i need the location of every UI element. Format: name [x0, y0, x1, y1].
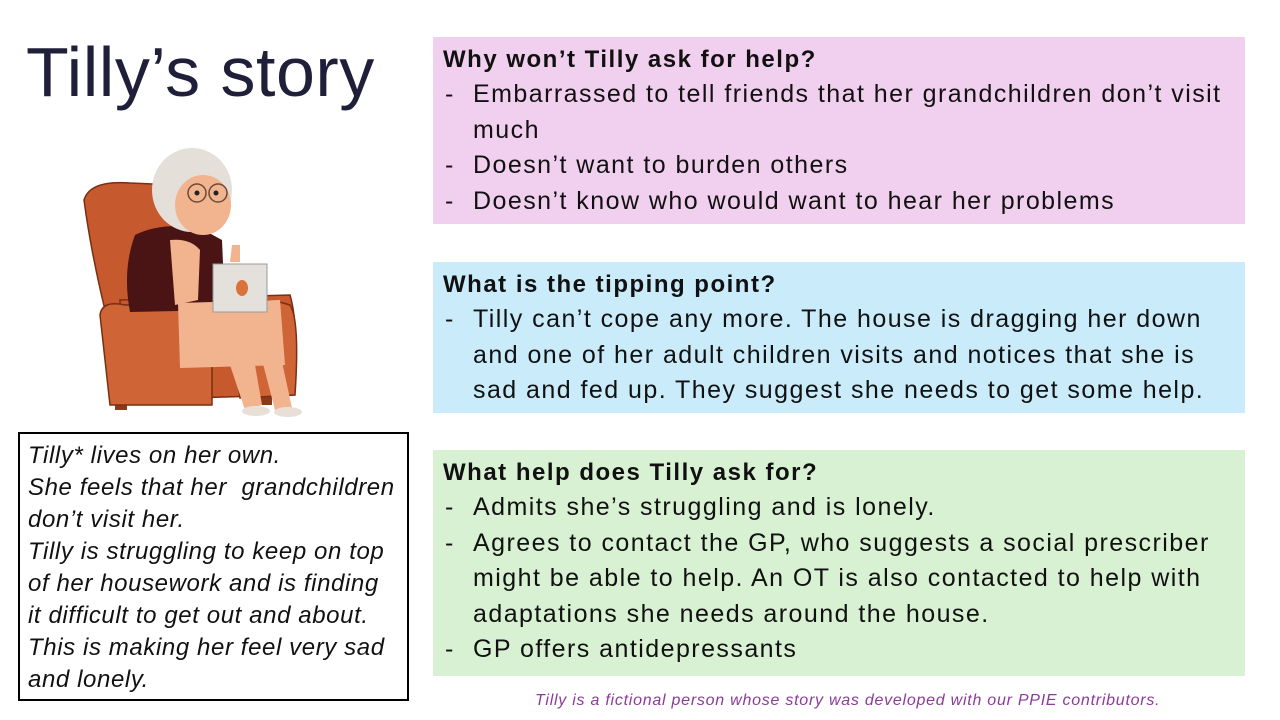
panel: what help does Tilly ask for — [433, 450, 1245, 676]
title: Tilly’s story — [26, 33, 375, 111]
panel: what help does Tilly ask for: What help does Tilly ask for? — [443, 459, 818, 486]
illustration: Tilly in armchair — [83, 148, 302, 417]
panel: why won't Tilly ask for help: Why won’t Tilly ask for help? — [443, 46, 817, 73]
panel: tipping point: What is the tipping point? — [443, 271, 777, 298]
panel: tipping point: Tilly can’t cope any more. The house is dragging her down and one of her adult children visits and notices that she is sad and fed up. They suggest she needs to get some help. — [473, 305, 1204, 404]
panel: what help does Tilly ask for: GP offers antidepressants — [473, 635, 797, 663]
text box: Tilly's background — [18, 432, 409, 701]
panel: why won't Tilly ask for help: Embarrassed to tell friends that her grandchildren don’t visit much — [473, 80, 1222, 144]
panel: what help does Tilly ask for: Admits she’s struggling and is lonely. — [473, 493, 936, 521]
panel: why won't Tilly ask for help: Doesn’t know who would want to hear her problems — [473, 186, 1115, 214]
text box: Tilly's background: Tilly is struggling to keep on top of her housework and is finding it difficult to get out and about. — [28, 538, 384, 629]
panel: tipping point — [433, 262, 1245, 413]
text box: Tilly's background: This is making her feel very sad and lonely. — [28, 634, 385, 693]
panel: what help does Tilly ask for: Agrees to contact the GP, who suggests a social prescriber might be able to help. An OT is also contacted to help with adaptations she needs around the house. — [473, 528, 1210, 628]
text box: Tilly's background: She feels that her grandchildren don’t visit her. — [28, 474, 395, 533]
footnote: Tilly is a fictional person whose story was developed with our PPIE contributors. — [535, 692, 1160, 709]
panel: why won't Tilly ask for help — [433, 37, 1245, 224]
text box: Tilly's background: Tilly* lives on her own. — [28, 442, 281, 469]
panel: why won't Tilly ask for help: Doesn’t want to burden others — [473, 151, 849, 179]
